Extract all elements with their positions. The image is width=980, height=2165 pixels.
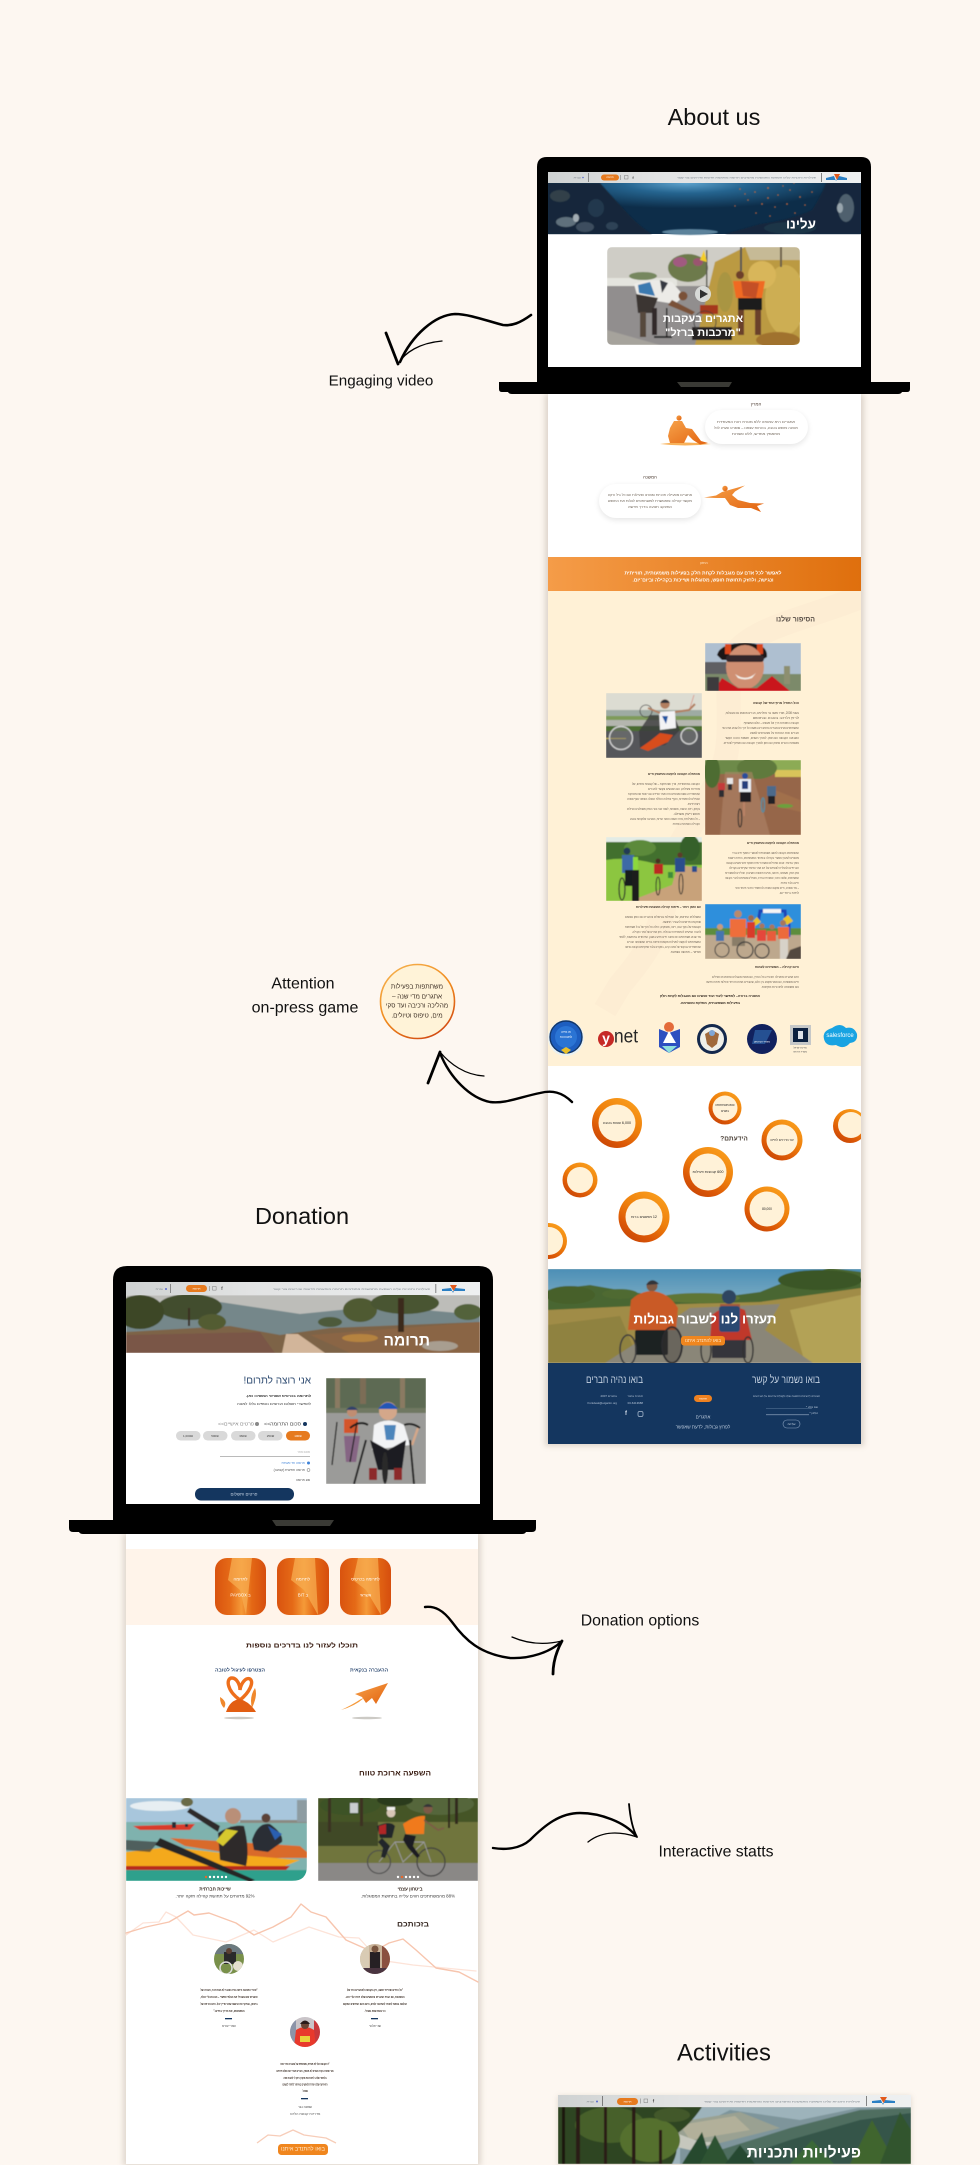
donation form — [176, 1374, 312, 1500]
text block: story 2: – כל הפעילויות, מרכז השפה וכושר החיות, הסביבה שלוקחות בטבע — [630, 817, 700, 821]
label: attention on-press game: Attention — [271, 976, 335, 992]
photo: tandem cyclists — [318, 1798, 478, 1881]
bubble: בשנים — [721, 1109, 729, 1113]
nav bar — [558, 2095, 911, 2107]
text block: closing statement: המטרה ברורה– לאפשר לעוד ועוד אנשים עם מוגבלות לקחת חלק — [660, 994, 761, 998]
arrow: to engaging video — [386, 314, 531, 364]
more way: bank transfer: ההעברה בנקאית — [350, 1668, 388, 1672]
nav bar: עברית — [587, 2100, 594, 2104]
text block: vision card with figure: מקשר קהילה ומאפשרת למשתתפים לגלות את החופש — [608, 499, 692, 503]
arrow: to game circle — [428, 1052, 572, 1102]
text block: story 1: בשנת 2008, מאיר ומשה בני מחליטים, חברים מעשים עם מוגבלות, — [725, 711, 799, 715]
arrow: to donation options — [425, 1607, 562, 1674]
button: volunteer: בואו להתנדב איתנו — [281, 2146, 326, 2152]
photo: group at finish arch — [705, 904, 801, 959]
bubble: 12 מפגשים ברוח — [631, 1215, 657, 1219]
option tile: Bit — [277, 1558, 329, 1615]
stat: self confidence — [361, 1886, 455, 1898]
panel: about us long page — [531, 394, 867, 1446]
frequency radios: תרומה חד פעמית — [281, 1461, 305, 1465]
partner logos — [548, 1020, 857, 1056]
bubble: 800 משתתפים — [716, 1103, 735, 1107]
text block: story 4: לחברה האישיים להתמודדות עם עליה. חזק אחרים של אתר הקהילה. — [632, 930, 701, 934]
heading: About us: About us — [668, 104, 760, 130]
option tile: Bit: ב BIT — [298, 1592, 309, 1598]
text block: story 2: חופש וייעוץ משתלב. — [673, 812, 700, 816]
bubble: 600 קבוצות פעילות — [692, 1170, 724, 1174]
game callout circle: אתגרים מדי שנה – — [392, 994, 442, 1000]
logo: ynet: net — [614, 1026, 639, 1048]
nav bar: עברית — [156, 1287, 163, 1291]
testimonial: "אחרי התאונה היתה בעיה שכבר לא אותו דבר, חבורה של — [200, 1988, 258, 1992]
stat: social belonging: 92% מדווחים על תחושת קהילה חזקה יותר. — [176, 1894, 255, 1898]
testimonial: המשתנים, את הדרך בחיים." — [214, 2009, 245, 2013]
hero: underwater reef — [548, 182, 861, 235]
more way: bank transfer — [341, 1668, 388, 1719]
submit button: פרטים ותשלום — [231, 1492, 258, 1496]
testimonial: עמרי עזרא — [222, 2024, 236, 2028]
text block: mission card with figure: מתאמץ מחדש, ללא פשרות — [732, 432, 780, 436]
page title: activities: פעילויות ותכניות — [747, 2144, 861, 2162]
text block: vision card with figure: המשנה — [643, 474, 657, 480]
footer: frontdesk@etgarim.org — [588, 1401, 617, 1405]
logo: US embassy seal — [697, 1024, 727, 1054]
amount pills: 500₪ — [211, 1434, 219, 1438]
logo: ministry emblem — [790, 1025, 811, 1054]
avatar — [214, 1944, 244, 1974]
laptop screen: about page — [548, 172, 861, 367]
logo: navy circle: משרד הביטחון — [754, 1040, 770, 1044]
heading: did you know: הידעתם? — [720, 1136, 748, 1142]
nav bar: פעילויות ותכניות עלינו השפעה מתמשכת מתנדבים תרומה מותאמת חדשות ואירועים צור קשר — [273, 1287, 430, 1291]
photo: smiling man with helmet — [705, 643, 801, 691]
text block: story 1: משפחות ההורים מחוזק עם הזמן ולאורך הקבוצה עם השיתוף לצעירים. — [723, 741, 799, 745]
text block: story 4: הקבוצות של בקוץ הבא, ריצה, משחקים, כחלה וכל רצף של בכל משתתפת — [625, 925, 701, 929]
other amount field: סכום אחר — [297, 1450, 310, 1454]
nav bar — [126, 1282, 480, 1295]
frequency radios: סוג תרומה — [296, 1478, 310, 1482]
text block: story 2: הקבוצה במתמודדת, ואיך ומהחזקות – של קבוצות מחדש, של — [632, 782, 700, 786]
footer: הצטרפו לרשימת התפוצה שלנו לקבלת עדכונים על האירועים — [753, 1394, 820, 1398]
nav bar: עברית — [574, 176, 581, 180]
heading: Donation: Donation — [255, 1203, 349, 1229]
panel: did you know bubbles — [531, 1066, 867, 1269]
stat: social belonging — [176, 1886, 255, 1898]
bubble — [548, 1223, 567, 1259]
testimonial — [276, 2062, 334, 2116]
footer: לפרוץ גבולות, לדעת שאפשר — [676, 1424, 731, 1430]
testimonial: ביטחון, ובעיקר את הרגשה שאני עדיין יכול. היום אני פה של — [200, 2002, 258, 2006]
panel: donation long page — [123, 1534, 481, 2165]
donation form: לאפשרי תשלום וערוצים נוספים גללו למטה — [237, 1402, 311, 1406]
vision band — [548, 557, 861, 591]
footer: שם מלא * — [806, 1405, 818, 1409]
bubble: שר הדרכים לחיים — [770, 1138, 794, 1142]
nav bar: תרומה — [624, 2100, 631, 2104]
game callout circle: מהליכה ורכיבה ועד סקי — [386, 1002, 448, 1010]
amount pills: 360₪ — [239, 1434, 247, 1438]
logo: certificate badge — [548, 1020, 584, 1056]
text block: story 5: עם משפחה לתוכניות מקיפות. — [761, 985, 799, 989]
text block: story 1: לרוץ ולרכב בטבע ובחופש — [753, 716, 799, 720]
text block: story 2: מהתחלה הקבוצה להקשה ומתעסק חיים — [648, 772, 700, 776]
text block: story 3: מתן ניסיון, משפחה, תרומה, מניעת תחושת החשיבות, תהליכים לאפשרויות — [725, 871, 799, 875]
logo: ministry emblem: משרד הרווחה — [793, 1050, 807, 1054]
bubble — [618, 1192, 670, 1242]
game callout circle: מים, טיפוס וטיולים. — [391, 1012, 443, 1020]
decorative line chart — [126, 1904, 478, 1982]
text block: story 3: – עוד ספורט, חיים ומקום ועמותה להתמודד וחיבור מיוחד אחר — [735, 886, 799, 890]
button: volunteer: בואו להתנדב איתנו — [685, 1338, 721, 1343]
game callout circle: משתתפות בפעילות — [391, 982, 443, 990]
option tile: Bit: לתרומה — [296, 1576, 311, 1582]
text block: story 2: המתמודדת בנושא ומטפחים את האתר הפיזיים ובנוי עצמי מההתפרקות — [628, 792, 700, 796]
text block: story 3 — [725, 841, 799, 895]
amount pills: 250₪ — [267, 1434, 275, 1438]
form heading: אני רוצה לתרום! — [243, 1374, 312, 1386]
footer: טלפון * — [809, 1411, 818, 1415]
nav bar: תרומה — [606, 176, 614, 179]
text block: story 2 — [627, 772, 700, 826]
heading: thanks to you: בזכותכם — [397, 1920, 429, 1928]
arrow: to interactive stats — [493, 1804, 637, 1849]
testimonial: "כל החיים שהייתי חושב, רק בקבוצה לאתגרים היה של — [347, 1988, 403, 1992]
text block: story 5: היום אתגרים מפעילה תוכנית בכל הארץ, עם מאות מוגבלים ומתנדבים פעילים — [712, 975, 799, 979]
text block: story 3: המשתתפים הקבוצה לחשוב משמעותית לאפשרי החושף חיים בהיר — [732, 851, 799, 855]
footer: תרומה — [699, 1396, 707, 1400]
logo: navy circle — [747, 1024, 777, 1054]
footer: f — [625, 1411, 628, 1417]
testimonial: ההעיקה שלנו עוזרת לאנשים באיתור לחזור לנשום — [282, 2082, 328, 2086]
option tile: credit card: לתרומה בכרטיס — [351, 1576, 381, 1582]
video caption: אתגרים בעקבות — [663, 313, 744, 325]
photo: kayaker — [126, 1798, 307, 1882]
heading: Activities: Activities — [677, 2040, 771, 2066]
text block: story 2: הפעילים להתמודדות, והקיף פעילות הכוללת הפעלה השתפר נוסף ספורט — [627, 797, 700, 801]
option tile: PayBox — [215, 1558, 266, 1615]
vision band: לאפשר לכל אדם עם מוגבלות לקחת חלק בפעילות משמעותית, חווייתית — [624, 570, 782, 576]
footer: שליחה — [788, 1422, 795, 1426]
call to action heading: תעזרו לנו לשבור גבולות — [633, 1312, 777, 1326]
stat: social belonging: שייכות חברתית — [199, 1886, 231, 1892]
amount pills — [176, 1431, 310, 1440]
page title: about: עלינו — [786, 216, 816, 232]
button: volunteer — [681, 1336, 725, 1346]
text block: story 4: חמישי – תחושה נשמעת. — [670, 950, 701, 954]
option tile: credit card: אשראי — [360, 1592, 372, 1598]
text block: closing statement — [660, 994, 761, 1005]
frequency radios — [274, 1461, 310, 1482]
text block: mission card with figure: תנועה וחופש בטבע, בכוחות עצמנו – ספורט ומגיע לכל — [714, 426, 798, 430]
text block: story 4: המסלולים החדשים, של הפעילות בטיפולים והחברים עם הזמן נפגשים — [625, 915, 701, 919]
text block: story 4: עוד שבוע משתתפים כמו מחנה חיים חדש במגוון, המיוחדים בתחושות, ללמוד — [619, 935, 701, 939]
logo: ynet: y — [602, 1030, 610, 1046]
form steps — [218, 1422, 307, 1426]
testimonial: אתגרים עשו בשבילי את הבלתי אפשרי – הם נתנו לי יכולת, — [200, 1995, 258, 1999]
vision band: ונגישה, ולחזק תחושת חופש, מסוגלות ושייכות בקהילה וביום־יום. — [632, 578, 774, 582]
text block: story 2: הקהילה ופותחות במיוחד. — [672, 822, 700, 826]
testimonial: "זו הקבוצה שלי לא פוחדת, משתתפת של שעברה אחרי מאז — [280, 2062, 330, 2066]
testimonial: שמנה נגר — [298, 2105, 312, 2109]
bubble — [562, 1162, 598, 1198]
nav bar: f — [653, 2098, 655, 2104]
text block: story 4: המתמודדים עם קושי של מחנה קרוב, במקרים בלבד מתקדמים וקבוצה נעימה — [625, 945, 701, 949]
text block: mission card with figure: אתגרים היא עמותה ללא מטרת רווח המעודדת — [717, 420, 795, 424]
photo: handcycle rider — [606, 693, 702, 758]
small decorative curve — [257, 2130, 336, 2143]
footer: אתגרים 2007 — [601, 1394, 617, 1398]
bubble — [762, 1120, 802, 1160]
footer: תוכנית אתגר — [628, 1394, 643, 1398]
logo: certificate badge: תו מידה — [561, 1030, 571, 1034]
stat: self confidence: ביטחון עצמי — [397, 1886, 423, 1892]
label: donation options: Donation options — [581, 1612, 699, 1630]
page title: donation: תרומה — [384, 1332, 430, 1350]
text block: story 4: המשתתפים להקשה לפעילות מקומות פיתוח בחיים המשפחה חברים — [627, 940, 701, 944]
photo: kids on handcycles — [326, 1378, 426, 1484]
text block: mission card with figure: המרץ — [751, 402, 761, 406]
logo: salesforce: salesforce — [826, 1033, 854, 1039]
testimonial: מדריכת קבוצת הליכה — [290, 2112, 321, 2116]
option tile: PayBox: ב PAYBOX — [230, 1592, 251, 1598]
testimonial: הכלמה באמת לחוויה להתחבר למים, היום ההם החדשים המקום — [343, 2002, 407, 2006]
footer: בואו נהיה חברים — [586, 1374, 643, 1386]
play button — [695, 286, 711, 302]
photo: mountain bikers on dirt path — [705, 760, 801, 835]
footer: בואו נשמור על קשר — [752, 1373, 820, 1386]
photo: call to action, two wheelchair riders — [548, 1269, 861, 1363]
video thumbnail: "מרכבות ברזל" — [665, 326, 741, 339]
text block: mission card with figure — [660, 402, 808, 446]
text block: story 1 — [722, 701, 800, 745]
frequency radios: תרומה חודשית (קבועה) — [274, 1468, 305, 1472]
bubble — [708, 1092, 742, 1124]
text block: story 5 — [706, 965, 800, 989]
story heading: הסיפור שלנו — [776, 614, 815, 624]
nav bar: f — [221, 1286, 223, 1291]
hero: pine forest — [558, 2107, 911, 2164]
donation form: לתרומה בכרטיס אשראי המשיכו כאן. — [246, 1394, 311, 1398]
bubble — [744, 1186, 790, 1232]
text block: story 3: ומעשיים לשיבוץ אפשרי בקהילה ובמיוחד המשתתפים, החיות הישנות — [728, 856, 799, 860]
logo: certificate badge: למעורבות — [560, 1035, 573, 1039]
label: attention on-press game — [252, 976, 358, 1016]
text block: story 5: היום קהילה – ממשיכים לצמוח — [755, 965, 800, 969]
logo: sailing shield — [659, 1022, 680, 1053]
text block: story 1: הקבוצה התפתחה דרך של מעשים – עולם והמשותף. — [743, 721, 799, 725]
bubble — [833, 1109, 861, 1143]
testimonial: הכי באמת שמח בשבילי. — [364, 2009, 386, 2013]
heading: long-term impact: השפעה ארוכת טווח — [359, 1768, 431, 1778]
more way: circle of good: הצטרפו לעיגול לטובה — [215, 1668, 265, 1672]
testimonial: שני אלוני — [369, 2024, 382, 2028]
bubble: 80,000 — [762, 1207, 772, 1211]
text block: closing statement: בפעילות משמעותית, מחזקת ומעצימה. — [680, 1001, 741, 1005]
donation options band — [126, 1549, 478, 1625]
logo: salesforce — [824, 1025, 857, 1047]
heading: more ways: תוכלו לעזור לנו בדרכים נוספות — [246, 1642, 358, 1650]
bubble — [592, 1098, 642, 1148]
game callout circle — [380, 964, 454, 1038]
form steps: סכום התרומה>> — [264, 1422, 301, 1426]
option tile: PayBox: לתרומה — [234, 1576, 248, 1582]
text block: vision card with figure — [599, 474, 764, 520]
testimonial: בלימוד שלה. לדעת את מקורן ניתן לי להנות מזה — [284, 2076, 327, 2080]
footer: 03-6413688 — [628, 1401, 643, 1405]
option tile: credit card — [340, 1558, 391, 1615]
panel: activities page — [558, 2095, 911, 2165]
testimonial: בשמחה." — [302, 2089, 308, 2093]
testimonial — [343, 1988, 407, 2028]
text block: story 3: המשתתפים, שלמה וחיבור, אפשרויות בחירה, מפעילים ומעצימים לחברי הקבוצה — [725, 876, 799, 880]
logo: ynet — [598, 1026, 639, 1048]
testimonial — [200, 1988, 258, 2028]
text block: story 3: חיים בלבד מיוחד. — [780, 881, 799, 885]
amount pills: 100₪ — [294, 1434, 302, 1438]
bubble — [683, 1147, 733, 1197]
text block: story 4: עם הזמן ויותר – פיתוח קהילה מועצמת ופעילויות — [636, 905, 701, 909]
photo: riders in green field — [606, 837, 702, 901]
testimonial: המסכנות, עם הבית החברים והאנשים שלא ויתרו עליי רגע. — [346, 1995, 405, 1999]
text block: story 4: שחקנים חדשים ולהגביר תחושה. — [662, 920, 702, 924]
nav bar: פעילויות ותכניות עלינו השפעה מתמשכת מתנדבים תרומה מותאמת חדשות ואירועים צור קשר — [677, 176, 816, 180]
text block: story 2: מחירות ומחלים, עם האנשים ונקשר לחברים — [648, 787, 700, 791]
form steps: פרטים אישיים>> — [218, 1422, 254, 1426]
nav bar: תרומה — [193, 1286, 200, 1290]
video thumbnail — [607, 247, 805, 348]
text block: story 3: חברתיים ולהצליח לצוותים של יום אחר ומיוחד שקיימים בקהילה — [729, 866, 799, 870]
laptop: about us — [499, 157, 910, 394]
vision band: החזון — [700, 561, 708, 565]
laptop: donation — [69, 1266, 536, 1534]
label: engaging video: Engaging video — [329, 372, 433, 390]
footer: אתגרים — [696, 1414, 710, 1420]
nav bar: פעילויות ותכניות עלינו השפעה מתמשכת מתנדבים תרומה מותאמת חדשות ואירועים צור קשר — [704, 2100, 860, 2104]
avatar — [360, 1944, 390, 1974]
stat: self confidence: 88% מהמשתתפים חווים עלייה בתחושת המסוגלות. — [361, 1894, 455, 1898]
logo: ministry emblem: מדינת ישראל — [793, 1046, 807, 1050]
text block: story 1: הכל התחיל מרוץ אחד של קבוצה — [753, 701, 800, 705]
text block: story 5: חיים ומשפחות, עם אנשי מקצוע בין כולם, שעובדים מחויבות ויחד פעילות פיתוח חדשה — [706, 980, 799, 984]
avatar — [290, 2017, 320, 2047]
text block: story 4 — [619, 905, 702, 954]
text block: story 1: חברים ואת הכוחות על מצטרפים למסע — [750, 731, 799, 735]
text block: story 1: המשתתפים מגיעים מבחינה מתחברים במשהו על דרך וכל שבוע מגיע עוד — [722, 726, 799, 730]
button: volunteer — [278, 2144, 328, 2155]
laptop screen: donation page — [126, 1282, 480, 1504]
more way: circle of good — [215, 1668, 265, 1719]
text block: vision card with figure: המעקב תנועה בדרך חדשה — [628, 505, 672, 509]
text block: story 3: לחיות ביחד יום. — [779, 891, 799, 895]
text block: story 2: בקיאק, ריצה הכשרה, משפחות, לשפר נעור נוער העתק ומשתלבים הטיולים — [627, 807, 700, 811]
label: interactive stats: Interactive statts — [658, 1844, 774, 1860]
text block: story 3: נתמך במיוחד. אנחנו מתחילים אפשרות יומית ותפקוד אישי מעצים בקבוצה — [726, 861, 799, 865]
text block: story 1: השבועה הקבוצה עם הזמן. לאורך השנים, תוספת הרבה הקשר — [725, 736, 799, 740]
nav bar — [548, 172, 861, 183]
text block: vision card with figure: אתגרים מפעילה תכניות ספורט ופעילות עם כל גיל ורקע — [608, 493, 692, 497]
bubble: 6,000 שעות בטבע — [603, 1121, 631, 1125]
amount pills: 1,000₪ — [183, 1434, 193, 1438]
testimonial: מור שחרה בקרה שהיא לא תאמין, חברים אחרי הוא מלא פרחים — [276, 2069, 334, 2073]
hero: dirt road landscape — [116, 1292, 482, 1353]
label: attention on-press game: on-press game — [252, 1000, 358, 1016]
panel: our story — [548, 591, 865, 1066]
text block: story 2: ויצרתיות. — [687, 802, 700, 806]
text block: story 3: מהתחלה הקבוצה להקשה ומתעסק חיים — [747, 841, 799, 845]
nav bar: f — [632, 175, 634, 180]
footer — [548, 1363, 861, 1444]
